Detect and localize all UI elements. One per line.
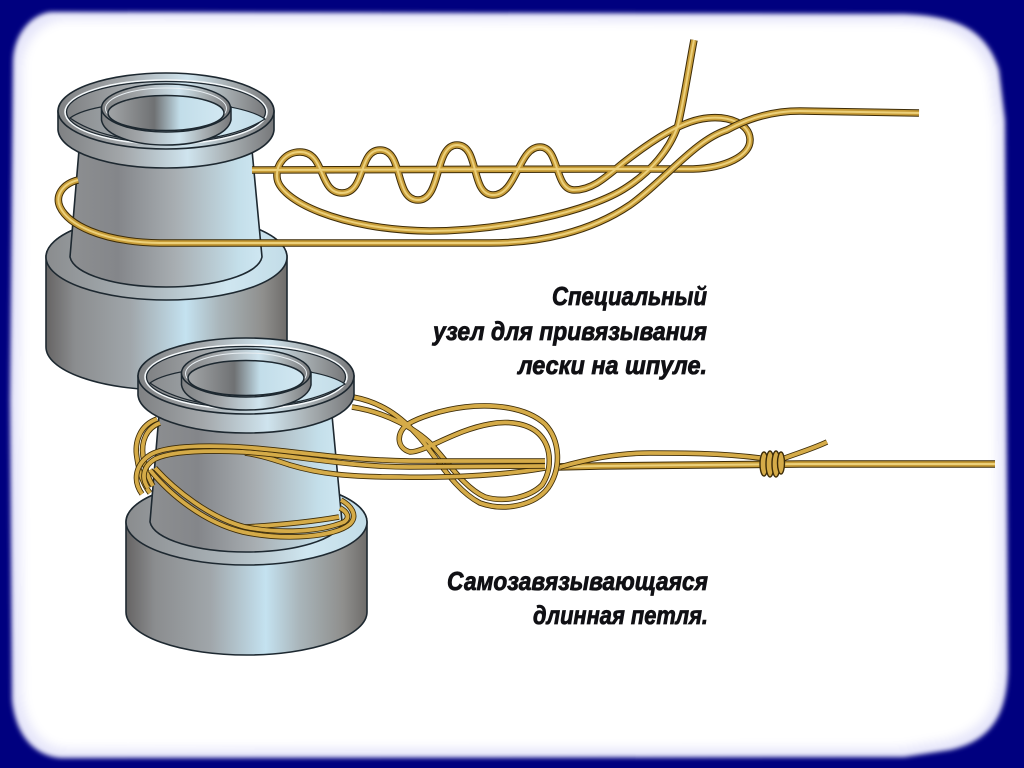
long loop line, left strands [136, 419, 160, 493]
long loop line, main bundle [136, 446, 545, 494]
caption: special knot: лески на шпуле. [516, 350, 707, 380]
illustration: upper spool with special knot [46, 40, 919, 390]
fishing line knot on spool 1 [58, 40, 919, 243]
long loop line, standing part and tag [556, 442, 995, 467]
small knot [760, 451, 784, 477]
caption: special knot: узел для привязывания [431, 316, 707, 346]
long loop line, wrap around the spool [150, 468, 354, 537]
spool 1 flange [58, 73, 274, 168]
caption: special knot [431, 281, 707, 380]
caption: special knot: Специальный [552, 281, 707, 311]
caption: self-tying long loop: Самозавязывающаяся [447, 566, 708, 596]
illustration: lower spool with self-tying long loop [126, 338, 995, 655]
spool 1 lower body [46, 150, 287, 390]
spool 2 lower body [126, 415, 367, 655]
spool 2 flange [138, 338, 354, 433]
long loop line, big loop [352, 397, 557, 507]
caption: self-tying long loop: длинная петля. [533, 600, 708, 630]
caption: self-tying long loop [447, 566, 708, 630]
